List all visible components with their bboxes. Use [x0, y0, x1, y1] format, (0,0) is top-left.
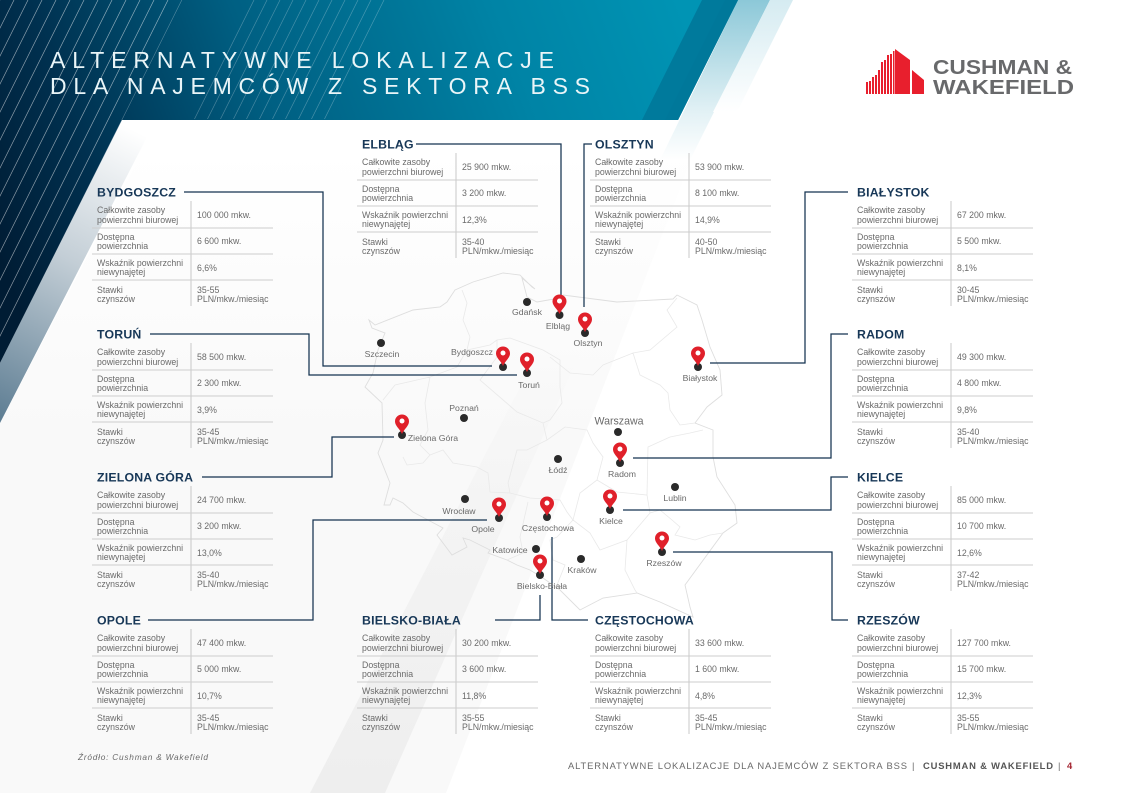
pin: Radom: Radom — [608, 469, 636, 479]
table: Rzeszów: powierzchni biurowej — [857, 643, 938, 653]
table: Toruń: 35-45 — [197, 427, 220, 437]
pin: Kielce: Kielce — [599, 516, 623, 526]
table: Elbląg: Całkowite zasoby — [362, 157, 431, 167]
table: Kielce: Stawki — [857, 570, 883, 580]
table: Zielona Góra: 35-40 — [197, 570, 220, 580]
table: Białystok: Dostępna — [857, 232, 895, 242]
table: Opole: PLN/mkw./miesiąc — [197, 722, 269, 732]
table: Bielsko-Biała: czynszów — [362, 722, 401, 732]
table: Zielona Góra: Stawki — [97, 570, 123, 580]
table: Olsztyn: Wskaźnik powierzchni — [595, 210, 681, 220]
panel: Opole — [92, 614, 273, 734]
city dots and labels — [365, 298, 687, 575]
table: Olsztyn: powierzchnia — [595, 193, 646, 203]
table: Częstochowa: 4,8% — [695, 691, 715, 701]
table: Rzeszów: czynszów — [857, 722, 896, 732]
panel: Bydgoszcz — [92, 186, 273, 306]
title: DLA NAJEMCÓW Z SEKTORA BSS — [50, 73, 590, 99]
pin: Olsztyn: Olsztyn — [574, 338, 603, 348]
table: Bydgoszcz: Całkowite zasoby — [97, 205, 166, 215]
table: Opole: niewynajętej — [97, 695, 145, 705]
table: Częstochowa: Stawki — [595, 713, 621, 723]
pin: Toruń: Toruń — [518, 380, 540, 390]
map of Poland — [365, 273, 737, 617]
table: Toruń: niewynajętej — [97, 409, 145, 419]
heading: Bielsko-Biała: BIELSKO-BIAŁA — [362, 614, 461, 628]
table: Kielce: Dostępna — [857, 517, 895, 527]
background: light diagonal bands — [0, 0, 793, 793]
table: Bydgoszcz — [92, 201, 273, 306]
table: Zielona Góra — [92, 486, 273, 591]
table: Kielce: powierzchni biurowej — [857, 500, 938, 510]
table: Rzeszów: niewynajętej — [857, 695, 905, 705]
table: Bielsko-Biała: PLN/mkw./miesiąc — [462, 722, 534, 732]
table: Elbląg: 25 900 mkw. — [462, 162, 511, 172]
pin: Olsztyn — [574, 312, 603, 348]
table: Bydgoszcz: czynszów — [97, 294, 136, 304]
table: Radom: Całkowite zasoby — [857, 347, 926, 357]
footer: ALTERNATYWNE LOKALIZACJE DLA NAJEMCÓW Z SEKTORA BSS — [568, 760, 907, 771]
table: Bielsko-Biała: 3 600 mkw. — [462, 664, 506, 674]
table: Rzeszów — [852, 629, 1033, 734]
table: Białystok: PLN/mkw./miesiąc — [957, 294, 1029, 304]
pin: Zielona Góra — [395, 414, 458, 443]
panel: Częstochowa — [590, 614, 771, 734]
table: Częstochowa: powierzchnia — [595, 669, 646, 679]
table: Zielona Góra: Całkowite zasoby — [97, 490, 166, 500]
table: Częstochowa: 33 600 mkw. — [695, 638, 744, 648]
pin: Opole — [471, 498, 506, 534]
pin: Kielce — [599, 490, 623, 526]
panel: Toruń — [92, 326, 273, 448]
table: Białystok: Stawki — [857, 285, 883, 295]
table: Opole: Wskaźnik powierzchni — [97, 686, 183, 696]
table: Radom: Dostępna — [857, 374, 895, 384]
footer: | — [1058, 760, 1060, 771]
table: Kielce: Wskaźnik powierzchni — [857, 543, 943, 553]
table: Toruń: 58 500 mkw. — [197, 352, 246, 362]
table: Częstochowa: 35-45 — [695, 713, 718, 723]
table: Rzeszów: powierzchnia — [857, 669, 908, 679]
pin: Bydgoszcz — [451, 346, 510, 371]
table: Elbląg: 12,3% — [462, 215, 487, 225]
pin: Opole: Opole — [471, 524, 495, 534]
table: Kielce: PLN/mkw./miesiąc — [957, 579, 1029, 589]
table: Bydgoszcz: Wskaźnik powierzchni — [97, 258, 183, 268]
table: Bielsko-Biała: 30 200 mkw. — [462, 638, 511, 648]
table: Białystok: Wskaźnik powierzchni — [857, 258, 943, 268]
footer: | — [912, 760, 914, 771]
table: Elbląg: Dostępna — [362, 184, 400, 194]
table: Białystok: powierzchni biurowej — [857, 215, 938, 225]
city dots and labels: Łódź — [549, 465, 567, 475]
heading: Elbląg: ELBLĄG — [362, 138, 414, 152]
table: Kielce: 37-42 — [957, 570, 980, 580]
table: Toruń: Stawki — [97, 427, 123, 437]
table: Radom: Wskaźnik powierzchni — [857, 400, 943, 410]
table: Białystok: 67 200 mkw. — [957, 210, 1006, 220]
table: Olsztyn: czynszów — [595, 246, 634, 256]
table: Zielona Góra: PLN/mkw./miesiąc — [197, 579, 269, 589]
table: Toruń: Wskaźnik powierzchni — [97, 400, 183, 410]
table: Radom: powierzchni biurowej — [857, 357, 938, 367]
table: Białystok: Całkowite zasoby — [857, 205, 926, 215]
panel: Kielce — [852, 470, 1033, 591]
panel: Białystok — [852, 186, 1033, 306]
table: Zielona Góra: Wskaźnik powierzchni — [97, 543, 183, 553]
table: Bielsko-Biała: 35-55 — [462, 713, 485, 723]
table: Olsztyn: 40-50 — [695, 237, 718, 247]
table: Bydgoszcz: 6,6% — [197, 263, 217, 273]
table: Zielona Góra: 24 700 mkw. — [197, 495, 246, 505]
panel: Rzeszów — [852, 612, 1033, 734]
heading: Zielona Góra: ZIELONA GÓRA — [97, 470, 193, 484]
table: Toruń: czynszów — [97, 436, 136, 446]
table: Olsztyn: PLN/mkw./miesiąc — [695, 246, 767, 256]
pin: Białystok: Białystok — [683, 373, 718, 383]
table: Olsztyn: Stawki — [595, 237, 621, 247]
table: Bydgoszcz: Stawki — [97, 285, 123, 295]
table: Rzeszów: 35-55 — [957, 713, 980, 723]
table: Radom: 9,8% — [957, 405, 977, 415]
table: Toruń: 2 300 mkw. — [197, 378, 241, 388]
title: ALTERNATYWNE LOKALIZACJE — [50, 47, 554, 73]
table: Białystok: czynszów — [857, 294, 896, 304]
table: Elbląg: Stawki — [362, 237, 388, 247]
table: Elbląg: powierzchni biurowej — [362, 167, 443, 177]
table: Opole: 35-45 — [197, 713, 220, 723]
table: Olsztyn: Dostępna — [595, 184, 633, 194]
heading: Bydgoszcz: BYDGOSZCZ — [97, 186, 176, 200]
table: Olsztyn: powierzchni biurowej — [595, 167, 676, 177]
table: Olsztyn: 53 900 mkw. — [695, 162, 744, 172]
table: Radom: 49 300 mkw. — [957, 352, 1006, 362]
table: Białystok: 5 500 mkw. — [957, 236, 1001, 246]
pin: Częstochowa: Częstochowa — [522, 523, 574, 533]
table: Radom: powierzchnia — [857, 383, 908, 393]
table: Bydgoszcz: PLN/mkw./miesiąc — [197, 294, 269, 304]
city dots and labels: Lublin — [663, 493, 687, 503]
city dots and labels: Kraków — [568, 565, 597, 575]
table: Toruń: powierzchnia — [97, 383, 148, 393]
table: Bielsko-Biała: Dostępna — [362, 660, 400, 670]
city dots and labels: Warszawa — [594, 416, 644, 428]
table: Częstochowa: PLN/mkw./miesiąc — [695, 722, 767, 732]
table: Opole: Stawki — [97, 713, 123, 723]
table: Zielona Góra: powierzchni biurowej — [97, 500, 178, 510]
city dots and labels: Wrocław — [442, 506, 476, 516]
pin: Radom — [608, 442, 636, 479]
table: Zielona Góra: powierzchnia — [97, 526, 148, 536]
table: Olsztyn: Całkowite zasoby — [595, 157, 664, 167]
table: Bydgoszcz: powierzchnia — [97, 241, 148, 251]
table: Elbląg: niewynajętej — [362, 219, 410, 229]
pin: Toruń — [518, 352, 540, 390]
table: Kielce: 10 700 mkw. — [957, 521, 1006, 531]
table: Bielsko-Biała: Całkowite zasoby — [362, 633, 431, 643]
table: Opole: powierzchni biurowej — [97, 643, 178, 653]
panel: Zielona Góra — [92, 470, 273, 591]
table: Olsztyn: 8 100 mkw. — [695, 188, 739, 198]
table: Toruń: 3,9% — [197, 405, 217, 415]
table: Radom: Stawki — [857, 427, 883, 437]
table: Radom: 35-40 — [957, 427, 980, 437]
pin: Częstochowa — [522, 496, 574, 533]
table: Opole: 10,7% — [197, 691, 222, 701]
pin: Rzeszów: Rzeszów — [646, 558, 682, 568]
table: Bielsko-Biała: Wskaźnik powierzchni — [362, 686, 448, 696]
table: Częstochowa: niewynajętej — [595, 695, 643, 705]
logo: Cushman & Wakefield — [866, 49, 1074, 99]
table: Bydgoszcz: Dostępna — [97, 232, 135, 242]
table: Opole: powierzchnia — [97, 669, 148, 679]
city dots and labels: Gdańsk — [512, 307, 543, 317]
connector lines — [148, 144, 848, 620]
city dots and labels: Katowice — [492, 545, 528, 555]
heading: Rzeszów: RZESZÓW — [857, 612, 920, 628]
table: Kielce: 12,6% — [957, 548, 982, 558]
heading: Kielce: KIELCE — [857, 470, 903, 484]
table: Częstochowa: Całkowite zasoby — [595, 633, 664, 643]
table: Toruń: Dostępna — [97, 374, 135, 384]
table: Bydgoszcz: niewynajętej — [97, 267, 145, 277]
table: Częstochowa — [590, 629, 771, 734]
pin: Białystok — [683, 346, 718, 383]
table: Rzeszów: PLN/mkw./miesiąc — [957, 722, 1029, 732]
table: Bielsko-Biała: Stawki — [362, 713, 388, 723]
table: Bydgoszcz: 35-55 — [197, 285, 220, 295]
city dots and labels: Poznań — [449, 403, 479, 413]
table: Radom: niewynajętej — [857, 409, 905, 419]
heading: Częstochowa: CZĘSTOCHOWA — [595, 614, 694, 628]
table: Bydgoszcz: 100 000 mkw. — [197, 210, 251, 220]
table: Zielona Góra: 3 200 mkw. — [197, 521, 241, 531]
table: Radom: czynszów — [857, 436, 896, 446]
logo: Cushman & Wakefield: WAKEFIELD — [933, 77, 1074, 99]
table: Elbląg: czynszów — [362, 246, 401, 256]
table: Opole: czynszów — [97, 722, 136, 732]
header banner — [0, 0, 738, 400]
heading: Białystok: BIAŁYSTOK — [857, 186, 930, 200]
table: Toruń: PLN/mkw./miesiąc — [197, 436, 269, 446]
panel: Radom — [852, 328, 1033, 448]
table: Białystok — [852, 201, 1033, 306]
table: Białystok: 30-45 — [957, 285, 980, 295]
table: Częstochowa: czynszów — [595, 722, 634, 732]
table: Częstochowa: 1 600 mkw. — [695, 664, 739, 674]
pin: Bydgoszcz: Bydgoszcz — [451, 347, 493, 357]
table: Radom: PLN/mkw./miesiąc — [957, 436, 1029, 446]
source note: Źródło: Cushman & Wakefield — [77, 752, 208, 762]
panel: Elbląg — [357, 138, 538, 258]
logo: Cushman & Wakefield: CUSHMAN & — [933, 57, 1072, 79]
table: Kielce — [852, 486, 1033, 591]
heading: Olsztyn: OLSZTYN — [595, 138, 654, 152]
footer: CUSHMAN & WAKEFIELD — [923, 760, 1053, 771]
table: Kielce: Całkowite zasoby — [857, 490, 926, 500]
heading: Toruń: TORUŃ — [97, 326, 142, 342]
heading: Radom: RADOM — [857, 328, 904, 342]
panel: Olsztyn — [590, 138, 771, 258]
table: Olsztyn: niewynajętej — [595, 219, 643, 229]
table: Kielce: 85 000 mkw. — [957, 495, 1006, 505]
table: Elbląg: 3 200 mkw. — [462, 188, 506, 198]
footer — [568, 760, 1073, 771]
table: Rzeszów: Stawki — [857, 713, 883, 723]
table: Bielsko-Biała — [357, 629, 538, 734]
table: Elbląg: powierzchnia — [362, 193, 413, 203]
table: Kielce: powierzchnia — [857, 526, 908, 536]
table: Opole: 5 000 mkw. — [197, 664, 241, 674]
table: Białystok: niewynajętej — [857, 267, 905, 277]
table: Bielsko-Biała: powierzchni biurowej — [362, 643, 443, 653]
table: Rzeszów: 12,3% — [957, 691, 982, 701]
table: Zielona Góra: 13,0% — [197, 548, 222, 558]
table: Zielona Góra: czynszów — [97, 579, 136, 589]
city dots and labels: Szczecin — [365, 349, 400, 359]
pin: Bielsko-Biała: Bielsko-Biała — [517, 581, 567, 591]
table: Opole: Całkowite zasoby — [97, 633, 166, 643]
table: Opole: Dostępna — [97, 660, 135, 670]
table: Elbląg: 35-40 — [462, 237, 485, 247]
table: Opole — [92, 629, 273, 734]
table: Rzeszów: 15 700 mkw. — [957, 664, 1006, 674]
table: Elbląg — [357, 153, 538, 258]
table: Toruń: Całkowite zasoby — [97, 347, 166, 357]
table: Olsztyn: 14,9% — [695, 215, 720, 225]
pin: Bielsko-Biała — [517, 554, 567, 591]
pin: Elbląg — [546, 294, 570, 331]
pin: Rzeszów — [646, 532, 682, 568]
table: Opole: 47 400 mkw. — [197, 638, 246, 648]
table: Bydgoszcz: powierzchni biurowej — [97, 215, 178, 225]
table: Bielsko-Biała: niewynajętej — [362, 695, 410, 705]
title — [50, 47, 590, 99]
table: Toruń: powierzchni biurowej — [97, 357, 178, 367]
table: Radom: 4 800 mkw. — [957, 378, 1001, 388]
table: Białystok: powierzchnia — [857, 241, 908, 251]
table: Zielona Góra: niewynajętej — [97, 552, 145, 562]
table: Kielce: czynszów — [857, 579, 896, 589]
table: Elbląg: PLN/mkw./miesiąc — [462, 246, 534, 256]
table: Zielona Góra: Dostępna — [97, 517, 135, 527]
panel: Bielsko-Biała — [357, 614, 538, 734]
table: Częstochowa: Dostępna — [595, 660, 633, 670]
table: Radom — [852, 343, 1033, 448]
table: Rzeszów: Całkowite zasoby — [857, 633, 926, 643]
table: Kielce: niewynajętej — [857, 552, 905, 562]
table: Rzeszów: 127 700 mkw. — [957, 638, 1011, 648]
table: Częstochowa: Wskaźnik powierzchni — [595, 686, 681, 696]
table: Elbląg: Wskaźnik powierzchni — [362, 210, 448, 220]
table: Bielsko-Biała: 11,8% — [462, 691, 486, 701]
pin: Zielona Góra: Zielona Góra — [408, 433, 458, 443]
footer: 4 — [1067, 760, 1073, 771]
table: Częstochowa: powierzchni biurowej — [595, 643, 676, 653]
table: Białystok: 8,1% — [957, 263, 977, 273]
table: Rzeszów: Wskaźnik powierzchni — [857, 686, 943, 696]
table: Toruń — [92, 343, 273, 448]
table: Rzeszów: Dostępna — [857, 660, 895, 670]
table: Bielsko-Biała: powierzchnia — [362, 669, 413, 679]
table: Olsztyn — [590, 153, 771, 258]
pin: Elbląg: Elbląg — [546, 321, 570, 331]
table: Bydgoszcz: 6 600 mkw. — [197, 236, 241, 246]
heading: Opole: OPOLE — [97, 614, 141, 628]
